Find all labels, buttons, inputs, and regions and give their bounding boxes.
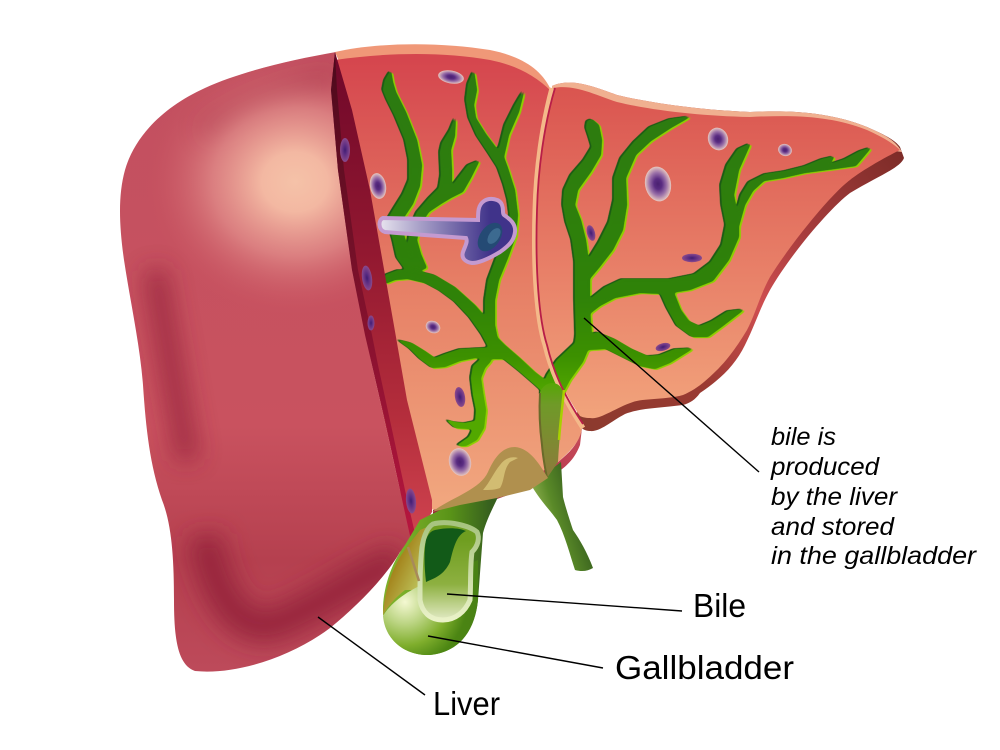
bile duct tree <box>381 69 874 447</box>
label: Liver: Liver <box>433 685 500 722</box>
callout text: and stored <box>771 513 895 541</box>
overlap with left lobe <box>383 525 432 615</box>
bright fundus <box>383 560 478 655</box>
callout text: by the liver <box>771 483 899 511</box>
portal vein <box>379 199 515 263</box>
label: Bile: Bile <box>693 587 746 624</box>
cell spots in cut face <box>368 68 794 478</box>
label: Gallbladder: Gallbladder <box>615 649 794 686</box>
gallbladder neck and body <box>383 492 500 655</box>
leader lines <box>318 318 759 695</box>
common bile duct <box>527 383 593 571</box>
gallbladder <box>383 447 548 655</box>
tan edge line over the overlap <box>408 547 419 581</box>
liver: lower rim of cut section <box>433 428 582 518</box>
liver: cut face left part <box>335 44 582 510</box>
bile sac <box>420 523 478 620</box>
callout text: produced <box>770 453 880 481</box>
falciform divider between lobes <box>534 88 583 428</box>
callout text <box>770 423 978 570</box>
callout text: in the gallbladder <box>771 542 978 570</box>
liver: right lobe <box>535 83 904 431</box>
cut edge band of liver <box>331 52 432 545</box>
callout text: bile is <box>771 423 836 451</box>
cystic duct arch over the liver <box>432 447 548 512</box>
liver: left lobe outer surface <box>120 52 410 672</box>
cystic duct light core <box>483 457 518 490</box>
